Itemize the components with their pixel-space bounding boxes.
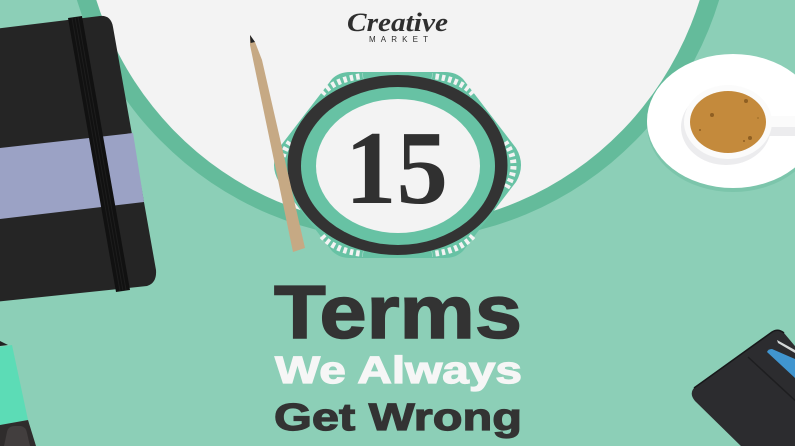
large plate: green rim and white centre xyxy=(62,0,734,240)
coffee xyxy=(690,91,766,153)
notebook xyxy=(0,16,156,302)
logo: Creative Market: MARKET xyxy=(369,35,428,44)
pencil xyxy=(250,35,305,252)
title xyxy=(274,270,522,439)
logo: Creative Market: Creative xyxy=(347,8,448,37)
title: Get Wrong xyxy=(274,397,522,439)
title: We Always xyxy=(275,350,522,392)
notebook elastic strap xyxy=(68,16,130,292)
wallet cards xyxy=(767,340,795,378)
badge: hexagon with hatching and rings xyxy=(274,72,521,258)
wallet xyxy=(692,330,795,446)
notebook band xyxy=(0,133,144,219)
number 15: 15 xyxy=(345,109,448,226)
coffee cup on saucer xyxy=(647,54,795,192)
highlighter xyxy=(0,341,36,446)
title: Terms xyxy=(274,270,522,354)
